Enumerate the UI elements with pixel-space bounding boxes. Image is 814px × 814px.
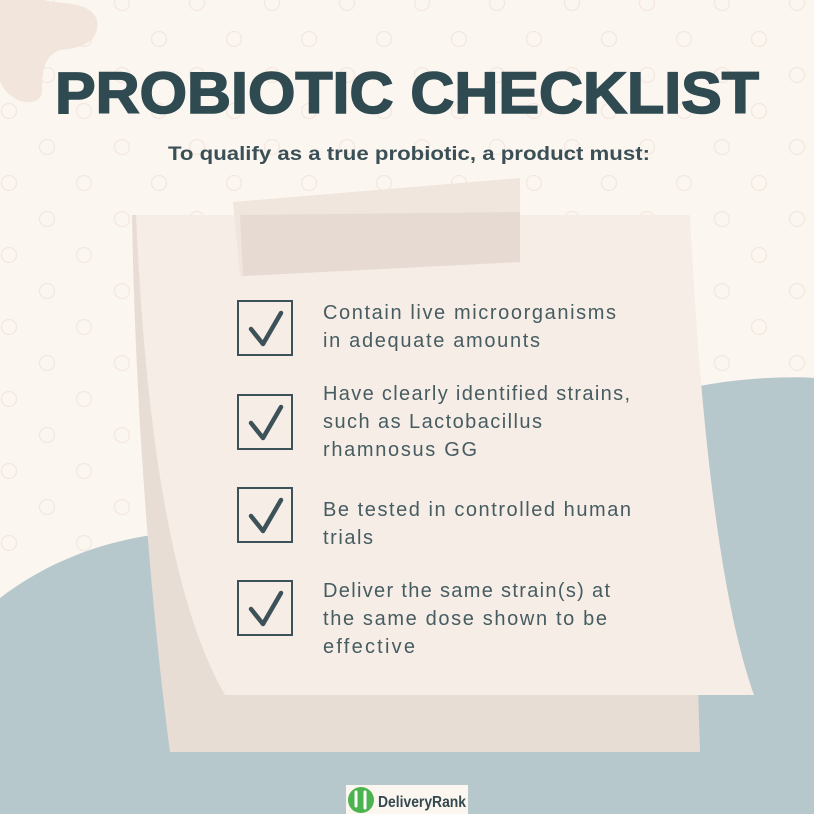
subtitle: To qualify as a true probiotic, a product must: <box>168 144 650 165</box>
item 4 <box>238 580 610 658</box>
blue background shape <box>0 377 814 814</box>
item 4: effective <box>323 636 415 658</box>
item 2: rhamnosus GG <box>323 439 477 461</box>
paper: front sheet <box>136 215 754 695</box>
item 1: Contain live microorganisms <box>323 302 616 324</box>
tape <box>233 178 520 276</box>
item 4: the same dose shown to be <box>323 608 607 630</box>
paper: back sheet <box>132 215 700 752</box>
item 4: Deliver the same strain(s) at <box>323 580 610 602</box>
item 1: in adequate amounts <box>323 330 540 352</box>
item 2 <box>238 383 630 461</box>
item 1 <box>238 301 616 355</box>
item 3: trials <box>323 527 373 549</box>
item 2: such as Lactobacillus <box>323 411 542 433</box>
decorative blob top-left <box>0 0 97 102</box>
item 2: Have clearly identified strains, <box>323 383 630 405</box>
logo: DeliveryRank <box>378 794 466 811</box>
logo <box>346 785 468 814</box>
item 3: Be tested in controlled human <box>323 499 631 521</box>
item 3 <box>238 488 631 549</box>
title: PROBIOTIC CHECKLIST <box>55 61 759 126</box>
checklist <box>238 301 631 658</box>
